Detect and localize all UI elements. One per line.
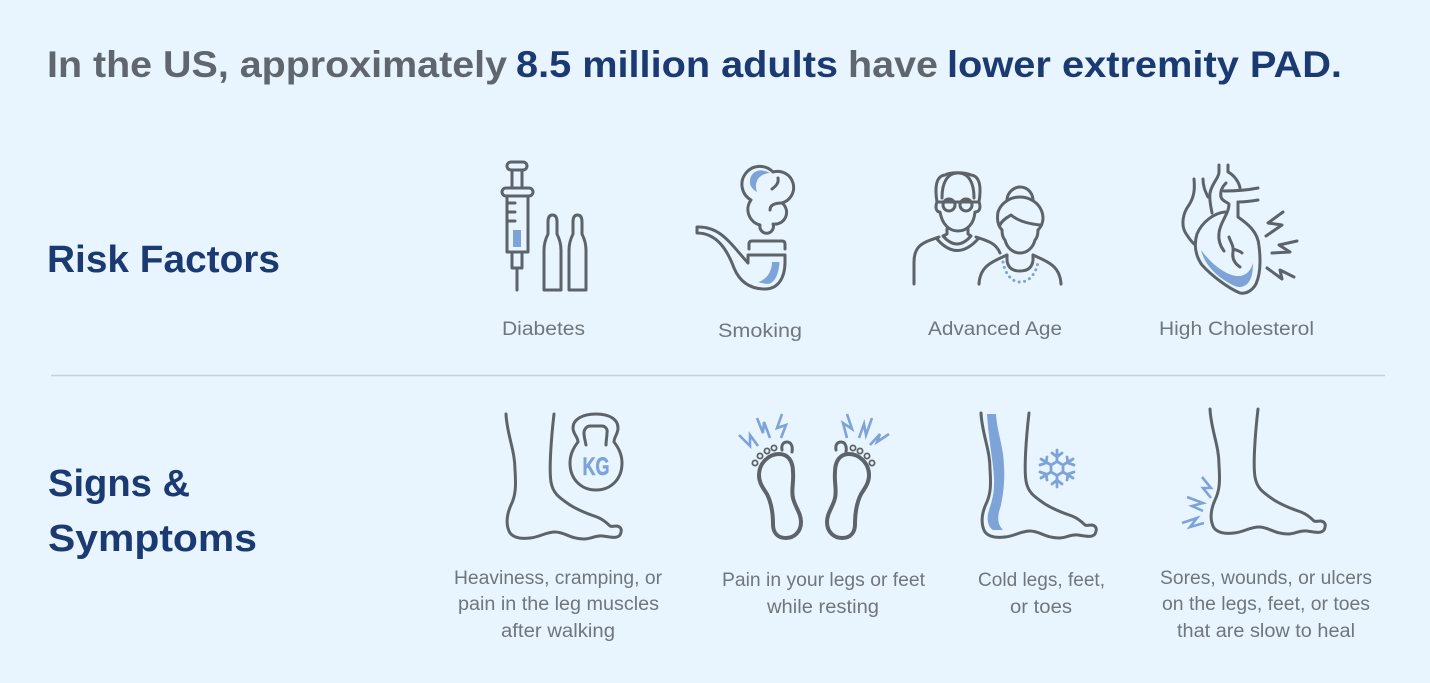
label: pain in legs or feet: Pain in your legs or feet: [722, 570, 926, 591]
label: advanced age: Advanced Age: [928, 319, 1062, 340]
label: heaviness, cramping, or pain: Heaviness, cramping, or: [454, 568, 663, 589]
label: heaviness, cramping, or pain: after walking: [501, 621, 615, 642]
title: have: [848, 44, 938, 85]
label: sores, wounds, or ulcers: [1160, 568, 1372, 642]
label: smoking: Smoking: [718, 321, 802, 342]
icon: leg with sores: [1182, 409, 1325, 534]
label: heaviness, cramping, or pain: [454, 568, 663, 642]
icon: smoking pipe: [697, 166, 794, 289]
icon: heart: [1183, 165, 1297, 293]
label: pain in legs or feet: while resting: [766, 597, 879, 618]
icon: cold leg with snowflake: [981, 413, 1096, 538]
icon: leg with kettlebell: [506, 414, 622, 539]
heading: signs and symptoms: Symptoms: [48, 518, 257, 560]
label: heaviness, cramping, or pain: pain in the leg muscles: [458, 594, 659, 615]
heading: signs and symptoms: [48, 463, 257, 560]
icon: feet with pain: [739, 414, 889, 538]
title: 8.5 million adults: [516, 44, 838, 85]
heading: signs and symptoms: Signs &: [48, 463, 190, 505]
label: high cholesterol: High Cholesterol: [1159, 319, 1314, 340]
icon: syringe and ampoules: [502, 162, 586, 290]
label: cold legs, feet, or toes: Cold legs, feet,: [978, 570, 1105, 591]
label: cold legs, feet, or toes: [978, 570, 1105, 618]
title: [47, 44, 1342, 85]
label: diabetes: Diabetes: [502, 319, 585, 340]
label: sores, wounds, or ulcers: that are slow to heal: [1177, 621, 1355, 642]
heading: risk factors: Risk Factors: [47, 239, 280, 281]
icon: leg with kettlebell: KG: [582, 453, 610, 481]
label: sores, wounds, or ulcers: on the legs, feet, or toes: [1162, 594, 1370, 615]
label: cold legs, feet, or toes: or toes: [1010, 597, 1072, 618]
label: sores, wounds, or ulcers: Sores, wounds, or ulcers: [1160, 568, 1372, 589]
title: lower extremity PAD.: [947, 44, 1342, 85]
title: In the US, approximately: [47, 44, 507, 85]
label: pain in legs or feet: [722, 570, 926, 618]
icon: older couple: [914, 173, 1061, 284]
